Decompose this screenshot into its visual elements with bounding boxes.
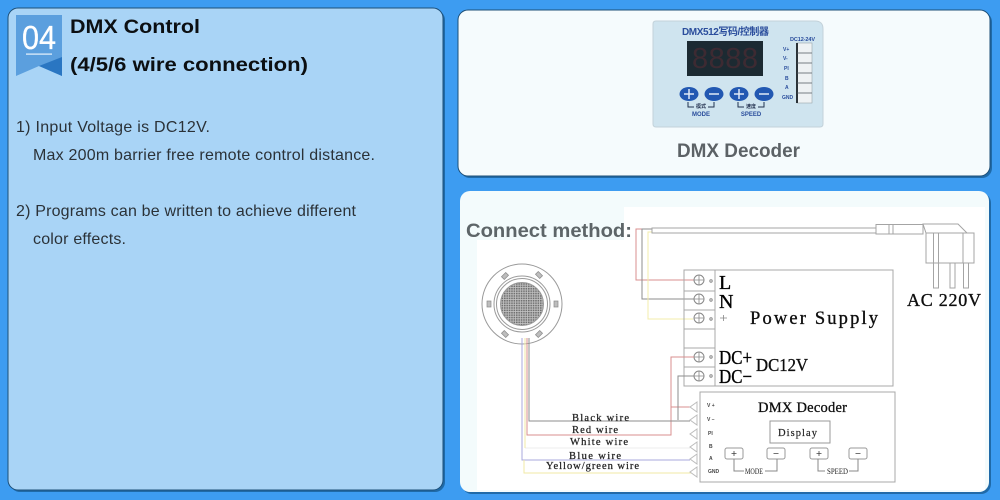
DMX decoder schematic [700,392,895,482]
photo caption: DMX Decoder [677,141,801,162]
DMX decoder schematic: V + [707,403,715,409]
text block: programs: 2) Programs can be written to achieve different [16,203,357,220]
DMX decoder schematic: V − [707,417,715,423]
LED lamp [482,264,562,344]
control buttons: MODE [692,112,710,118]
heading: (4/5/6 wire connection) [70,54,308,76]
terminal block: V+ [783,47,789,53]
connect method heading: Connect method: [466,221,632,242]
decoder device photo [653,21,823,127]
terminal block: DC12-24V [790,37,815,43]
power supply: DC− [719,366,752,388]
terminal block: A [785,85,789,91]
DMX decoder schematic: SPEED [827,467,848,476]
panel: description [8,8,445,492]
heading [70,16,308,76]
text block: voltage and distance [16,119,375,164]
control buttons [680,87,774,118]
wire labels [546,413,639,472]
terminal block: B [785,76,789,82]
seven segment display: 8888 [692,43,758,75]
power supply: L [719,272,731,294]
DMX decoder schematic: B [709,444,713,450]
wiring diagram [482,224,981,482]
power supply: DC+ [719,347,752,369]
power supply: DC12V [756,355,808,375]
panel: DMX decoder photo [458,10,992,178]
heading: DMX Control [70,16,200,38]
mains wires [636,229,695,319]
text block: voltage and distance: 1) Input Voltage is DC12V. [16,119,210,136]
terminal arrows [690,402,697,477]
control buttons: 速度 [746,103,756,110]
text block: voltage and distance: Max 200m barrier free remote control distance. [33,147,375,164]
panel: connection method [460,191,991,494]
wire labels: Red wire [572,425,618,436]
icon: number ribbon [16,15,62,76]
terminal block: PI [784,66,789,72]
control buttons: 模式 [696,103,706,110]
wire labels: White wire [570,437,628,448]
DMX decoder schematic: GND [708,469,720,475]
icon: number ribbon: 04 [22,19,56,56]
DMX decoder schematic: MODE [745,467,763,476]
text block: programs: color effects. [33,231,126,248]
terminal block: GND [782,95,794,101]
DMX decoder schematic: A [709,456,713,462]
power supply [684,270,893,388]
DMX decoder schematic: PI [708,431,713,437]
control buttons: SPEED [741,112,762,118]
plug [652,224,974,288]
decoder device photo: DMX512写码/控制器 [682,25,769,38]
wire labels: Blue wire [569,451,621,462]
text block: programs [16,203,357,248]
DMX decoder schematic: Display [778,428,818,439]
power supply: Power Supply [750,309,879,329]
control wires [522,338,694,473]
terminal block: V- [783,56,788,62]
terminal block [782,37,815,103]
DMX decoder schematic: DMX Decoder [758,400,847,416]
wire labels: Yellow/green wire [546,461,639,472]
wire labels: Black wire [572,413,629,424]
power supply: N [719,291,733,313]
plug label: AC 220V [907,290,981,310]
